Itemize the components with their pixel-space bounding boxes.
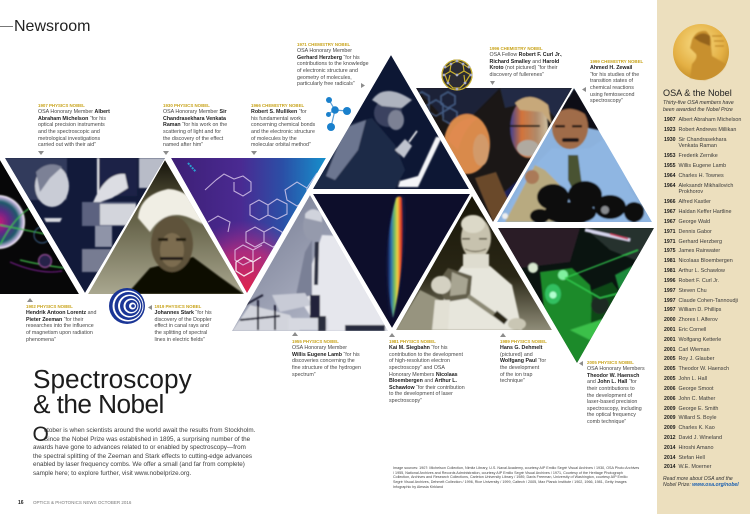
caption: 1999 Zewail: transition states of xyxy=(590,78,633,84)
photo: Herzberg xyxy=(313,55,469,189)
sidebar laureate list: 1981 xyxy=(664,258,676,264)
intro paragraph: awards have gone to advances related to or enabled by spectroscopy—from xyxy=(33,444,246,451)
sidebar laureate list: George Wald xyxy=(678,218,710,224)
sidebar laureate list: 2014 xyxy=(664,454,676,460)
sidebar laureate list: Nicolaas Bloembergen xyxy=(678,258,733,264)
sidebar laureate list: David J. Wineland xyxy=(678,435,722,441)
sidebar laureate list: 2006 xyxy=(664,396,676,402)
caption: 1902 Lorentz and Zeeman: Hendrik Antoon Lorentz and xyxy=(26,310,96,316)
caption: 2005 Haensch and Hall: laser-based precision xyxy=(587,399,637,405)
caption: 1989 Dehmelt and Paul: technique” xyxy=(500,378,525,384)
caption: 1981 Siegbahn, Bloembergen, Schawlow: of high-resolution electron xyxy=(389,358,450,364)
sidebar laureate list: 1966 xyxy=(664,199,676,205)
caption: 2005 Haensch and Hall: the development of xyxy=(587,393,632,399)
sidebar read-more note: Nobel Prize: www.osa.org/nobel xyxy=(663,482,739,488)
sidebar laureate list: Steven Chu xyxy=(678,288,707,294)
caption: 1919 Stark: the splitting of spectral xyxy=(154,330,207,336)
sidebar laureate list: 1997 xyxy=(664,298,676,304)
caption: 1907 Michelson: Abraham Michelson “for his xyxy=(38,116,106,122)
icon: concentric Stark rings xyxy=(109,288,145,324)
sidebar laureate list: Zhores I. Alferov xyxy=(678,317,718,323)
sidebar laureate list: 1964 xyxy=(664,172,676,178)
image credits xyxy=(393,466,640,489)
caption: 1989 Dehmelt and Paul: Wolfgang Paul “for xyxy=(500,358,546,364)
sidebar laureate list: Willard S. Boyle xyxy=(678,415,717,421)
caption: 1989 Dehmelt and Paul: (pictured) and xyxy=(500,352,533,358)
sidebar laureate list: 1971 xyxy=(664,228,676,234)
sidebar laureate list: William D. Phillips xyxy=(678,307,721,313)
main title xyxy=(33,364,192,419)
sidebar laureate list: 2001 xyxy=(664,346,676,352)
caption: 1902 Lorentz and Zeeman: of magnetism upon radiation xyxy=(26,330,93,336)
caption: 1989 Dehmelt and Paul: 1989 PHYSICS NOBEL xyxy=(500,338,547,344)
caption: 1930 Raman: named after him” xyxy=(163,142,203,148)
sidebar laureate list: 1930 xyxy=(664,136,676,142)
sidebar laureate list: Haldan Keffer Hartline xyxy=(678,209,731,215)
caption: 1999 Zewail xyxy=(590,58,644,104)
sidebar laureate list: 1923 xyxy=(664,127,676,133)
caption: 1955 Lamb: Willis Eugene Lamb “for his xyxy=(292,352,360,358)
sidebar laureate list: 1997 xyxy=(664,307,676,313)
caption: 1930 Raman: Chandrasekhara Venkata xyxy=(163,116,226,122)
sidebar laureate list: Aleksandr Mikhailovich xyxy=(678,182,733,188)
sidebar laureate list: Robert F. Curl Jr. xyxy=(678,278,719,284)
sidebar laureate list: Gerhard Herzberg xyxy=(678,238,722,244)
sidebar laureate list: 2001 xyxy=(664,327,676,333)
caption: 1966 Mulliken xyxy=(251,102,315,148)
intro paragraph: Since the Nobel Prize was established in 1895, a surprising number of the xyxy=(44,436,250,443)
caption: 1966 Mulliken: Robert S. Mulliken “for xyxy=(251,109,307,115)
sidebar laureate list: Venkata Raman xyxy=(678,143,717,149)
caption: 1902 Lorentz and Zeeman xyxy=(26,304,96,343)
photo: Dehmelt xyxy=(396,196,552,330)
intro paragraph: enabled by laser frequency combs. We offer a small (and far from complete) xyxy=(33,461,245,468)
sidebar laureate list: 1955 xyxy=(664,163,676,169)
icon: molecule xyxy=(326,97,351,131)
caption: 1996 Curl, Smalley, Kroto: Richard Smalley and Harold xyxy=(490,59,559,65)
sidebar laureate list: Willis Eugene Lamb xyxy=(678,163,726,169)
caption: 1955 Lamb: OSA Honorary Member xyxy=(292,345,347,351)
caption: 1966 Mulliken: and the electronic structure xyxy=(251,129,315,135)
caption: 1907 Michelson: metrological investigations xyxy=(38,136,100,142)
photo: Curl and Smalley xyxy=(415,88,572,222)
sidebar laureate list: Alfred Kastler xyxy=(678,199,711,205)
caption: 2005 Haensch and Hall: and John L. Hall “for xyxy=(587,379,637,385)
caption: 1907 Michelson: and the spectroscopic and xyxy=(38,129,100,135)
caption: 1955 Lamb: spectrum” xyxy=(292,372,316,378)
caption: 1919 Stark xyxy=(154,304,212,343)
sidebar laureate list: 2009 xyxy=(664,425,676,431)
intro paragraph: the spectral splitting of the Zeeman and Stark effects to cutting-edge advances xyxy=(33,453,252,460)
main title: & the Nobel xyxy=(33,389,164,419)
sidebar laureate list: George Smoot xyxy=(678,386,714,392)
caption: 1996 Curl, Smalley, Kroto: Kroto (not pictured) “for their xyxy=(490,65,558,71)
sidebar background xyxy=(657,0,750,514)
icon: Nobel medal xyxy=(673,24,729,80)
caption: 1955 Lamb xyxy=(292,338,361,378)
caption: 1981 Siegbahn, Bloembergen, Schawlow: Kai M. Siegbahn “for his xyxy=(389,345,448,351)
caption: 1907 Michelson: carried out with their aid” xyxy=(38,142,96,148)
caption: 1981 Siegbahn, Bloembergen, Schawlow: Honorary Members Nicolaas xyxy=(389,372,458,378)
sidebar laureate list: 2005 xyxy=(664,376,676,382)
caption: 1989 Dehmelt and Paul: Hans G. Dehmelt xyxy=(500,345,542,351)
sidebar laureate list: John L. Hall xyxy=(678,376,707,382)
intro paragraph xyxy=(32,423,255,477)
sidebar laureate list: Theodor W. Haensch xyxy=(678,366,729,372)
sidebar laureate list: Hiroshi Amano xyxy=(678,444,714,450)
caption: 1981 Siegbahn, Bloembergen, Schawlow: Schawlow “for their contribution xyxy=(389,385,465,391)
intro paragraph: O xyxy=(32,423,49,446)
intro paragraph: sample here; to explore further, visit www.nobelprize.org. xyxy=(33,470,191,477)
sidebar heading: OSA & the Nobel xyxy=(663,88,732,98)
sidebar laureate list: George E. Smith xyxy=(678,406,718,412)
sidebar laureate list: 1907 xyxy=(664,117,676,123)
caption: 1966 Mulliken: 1966 CHEMISTRY NOBEL xyxy=(251,102,304,108)
caption: 1996 Curl, Smalley, Kroto: 1996 CHEMISTRY NOBEL xyxy=(490,46,543,50)
sidebar laureate list: 1981 xyxy=(664,268,676,274)
sidebar laureate list: 2001 xyxy=(664,336,676,342)
caption: 1955 Lamb: discoveries concerning the xyxy=(292,358,355,364)
main title: Spectroscopy xyxy=(33,364,192,394)
sidebar laureate list: W.E. Moerner xyxy=(678,464,711,470)
triangle photo mosaic xyxy=(0,24,729,366)
caption: 1981 Siegbahn, Bloembergen, Schawlow: contribution to the development xyxy=(389,352,463,358)
sidebar laureate list: 2009 xyxy=(664,406,676,412)
caption: 1902 Lorentz and Zeeman: Pieter Zeeman “for their xyxy=(26,317,83,323)
caption: 1981 Siegbahn, Bloembergen, Schawlow: spectroscopy” xyxy=(389,398,422,404)
caption: 1971 Herzberg: particularly free radicals” xyxy=(297,81,355,87)
caption: 2005 Haensch and Hall: comb technique” xyxy=(587,419,626,425)
sidebar laureate list: 1953 xyxy=(664,153,676,159)
photo: molecular structure in purple xyxy=(171,158,326,293)
sidebar laureate list: James Rainwater xyxy=(678,248,720,254)
caption: 1930 Raman: Raman “for his work on the xyxy=(163,122,227,128)
sidebar laureate list: 2014 xyxy=(664,464,676,470)
image credits: Collection, Archives and Research Collections, Carleton University Library / 1989, Davis Freeman, University of Washington, courtesy AIP Emilio xyxy=(393,475,628,479)
caption: 1919 Stark: Johannes Stark “for his xyxy=(154,310,212,316)
photo: Lamb xyxy=(232,195,388,331)
caption: 1981 Siegbahn, Bloembergen, Schawlow: spectroscopy” and OSA xyxy=(389,365,445,371)
caption: 1907 Michelson: 1907 PHYSICS NOBEL xyxy=(38,102,85,108)
caption: 1907 Michelson xyxy=(38,102,110,148)
photo: Raman xyxy=(88,160,244,294)
caption: 1996 Curl, Smalley, Kroto: discovery of fullerenes” xyxy=(490,72,544,78)
caption: 1999 Zewail: chemical reactions xyxy=(590,85,634,91)
sidebar laureate list: Albert Abraham Michelson xyxy=(678,117,741,123)
caption: 1919 Stark: 1919 PHYSICS NOBEL xyxy=(154,304,201,308)
sidebar laureate list: Eric Cornell xyxy=(678,327,706,333)
caption: 1955 Lamb: fine structure of the hydrogen xyxy=(292,365,361,371)
caption: 1971 Herzberg: Gerhard Herzberg “for his xyxy=(297,55,360,61)
caption: 1999 Zewail: Ahmed H. Zewail xyxy=(590,65,632,71)
sidebar laureate list: Prokhorov xyxy=(678,189,703,195)
icon: fullerene ball xyxy=(442,60,472,90)
caption: 1907 Michelson: OSA Honorary Member Albert xyxy=(38,109,110,115)
sidebar laureate list: 1975 xyxy=(664,248,676,254)
sidebar laureate list: 1971 xyxy=(664,238,676,244)
caption: 1989 Dehmelt and Paul: the development xyxy=(500,365,539,371)
sidebar intro xyxy=(663,100,734,113)
caption: 1930 Raman: OSA Honorary Member Sir xyxy=(163,109,227,115)
sidebar laureate list: Wolfgang Ketterle xyxy=(678,336,721,342)
caption: 2005 Haensch and Hall: Theodor W. Haensch xyxy=(587,373,639,379)
sidebar laureate list: 2009 xyxy=(664,415,676,421)
caption: 1981 Siegbahn, Bloembergen, Schawlow: 1981 PHYSICS NOBEL xyxy=(389,338,436,344)
caption: 1919 Stark: effect in canal rays and xyxy=(154,323,209,329)
caption: 1955 Lamb: 1955 PHYSICS NOBEL xyxy=(292,338,339,344)
caption: 1999 Zewail: using femtosecond xyxy=(590,92,634,98)
caption: 1966 Mulliken: his fundamental work xyxy=(251,116,301,122)
caption: 1999 Zewail: 1999 CHEMISTRY NOBEL xyxy=(590,58,643,64)
sidebar laureate list: Frederik Zernike xyxy=(678,153,718,159)
section label: Newsroom: Newsroom xyxy=(14,18,90,35)
caption: 1902 Lorentz and Zeeman: 1902 PHYSICS NOBEL xyxy=(26,304,73,308)
sidebar laureate list: Stefan Hell xyxy=(678,454,705,460)
caption: 2005 Haensch and Hall xyxy=(587,360,645,425)
caption: 1930 Raman xyxy=(163,102,227,148)
sidebar laureate list: Robert Andrews Millikan xyxy=(678,127,736,133)
sidebar laureate list: 1964 xyxy=(664,182,676,188)
sidebar laureate list: 1996 xyxy=(664,278,676,284)
sidebar intro: Thirty-five OSA members have xyxy=(663,100,734,106)
caption: 1971 Herzberg: 1971 CHEMISTRY NOBEL xyxy=(297,42,350,46)
photo: Michelson xyxy=(5,158,165,293)
caption: 1902 Lorentz and Zeeman: phenomena” xyxy=(26,337,56,343)
caption: 1989 Dehmelt and Paul xyxy=(500,338,547,384)
caption: 1907 Michelson: optical precision instruments xyxy=(38,122,105,128)
sidebar laureate list: 1967 xyxy=(664,218,676,224)
page number: 16 xyxy=(18,500,24,506)
sidebar laureate list: Roy J. Glauber xyxy=(678,356,714,362)
sidebar laureate list: 2012 xyxy=(664,435,676,441)
caption: 1996 Curl, Smalley, Kroto: OSA Fellow Robert F. Curl Jr., xyxy=(490,52,563,58)
image credits: Segrè Visual Archives, Dehmelt Collection / 1996, Rice University / 1999, Caltech / 2005, Max Planck Institute / 1902, 1966, 1981, Getty Images xyxy=(393,480,627,484)
caption: 2005 Haensch and Hall: OSA Honorary Members xyxy=(587,366,645,372)
photo: green laser frequency comb lab xyxy=(498,228,654,363)
sidebar read-more note xyxy=(663,476,739,488)
sidebar laureate list: Sir Chandrasekhara xyxy=(678,136,726,142)
sidebar laureate list: 2000 xyxy=(664,317,676,323)
caption: 1902 Lorentz and Zeeman: researches into the influence xyxy=(26,323,94,329)
sidebar laureate list: Claude Cohen-Tannoudji xyxy=(678,298,738,304)
sidebar laureate list: Charles K. Kao xyxy=(678,425,715,431)
sidebar laureate list: John C. Mather xyxy=(678,396,715,402)
intro paragraph: ctober is when scientists around the world await the results from Stockholm. xyxy=(44,427,255,434)
photo: Zewail xyxy=(497,88,652,224)
sidebar laureate list: 1967 xyxy=(664,209,676,215)
caption: 1919 Stark: lines in electric fields” xyxy=(154,337,205,343)
sidebar laureate list: Charles H. Townes xyxy=(678,172,724,178)
caption: 1966 Mulliken: molecular orbital method” xyxy=(251,142,311,148)
photo: rainbow spectrum xyxy=(313,194,470,328)
caption: 1981 Siegbahn, Bloembergen, Schawlow xyxy=(389,338,465,404)
caption: 1999 Zewail: spectroscopy” xyxy=(590,98,623,104)
caption: 1971 Herzberg xyxy=(297,42,369,87)
caption: 1971 Herzberg: OSA Honorary Member xyxy=(297,48,352,54)
caption: 1971 Herzberg: geometry of molecules, xyxy=(297,75,352,81)
sidebar laureate list: 1997 xyxy=(664,288,676,294)
caption: 2005 Haensch and Hall: their contributions to xyxy=(587,386,635,392)
caption: 1996 Curl, Smalley, Kroto xyxy=(490,46,563,78)
caption: 1966 Mulliken: of molecules by the xyxy=(251,136,297,142)
caption: 2005 Haensch and Hall: the optical frequency xyxy=(587,412,636,418)
photo: plasma sphere xyxy=(0,160,79,294)
caption: 1930 Raman: the discovery of the effect xyxy=(163,136,223,142)
sidebar laureate list: 2014 xyxy=(664,444,676,450)
markers: small pointer triangles xyxy=(27,81,586,366)
image credits: Image sources: 1907: Michelson Collection, Nimitz Library, U.S. Naval Academy, courtesy AIP Emilio Segrè Visual Archives / 1930, OSA Photo Archives xyxy=(393,466,639,470)
caption: 1919 Stark: discovery of the Doppler xyxy=(154,317,212,323)
caption: 1930 Raman: 1930 PHYSICS NOBEL xyxy=(163,102,210,108)
sidebar read-more note: Read more about OSA and the xyxy=(663,476,733,482)
sidebar laureate list: 2005 xyxy=(664,356,676,362)
caption: 1989 Dehmelt and Paul: of the ion trap xyxy=(500,372,532,378)
image credits: / 1955, National Archives and Records Administration, courtesy AIP Emilio Segrè Visual Archives / 1971, Courtesy of the Heritage Photograph xyxy=(393,471,623,475)
sidebar laureate list: 2005 xyxy=(664,366,676,372)
sidebar laureate list: Carl Wieman xyxy=(678,346,710,352)
caption: 1966 Mulliken: concerning chemical bonds xyxy=(251,122,315,128)
running footer: OPTICS & PHOTONICS NEWS OCTOBER 2016 xyxy=(33,500,131,505)
sidebar laureate list: Arthur L. Schawlow xyxy=(678,268,725,274)
caption: 1999 Zewail: “for his studies of the xyxy=(590,72,639,78)
caption: 1981 Siegbahn, Bloembergen, Schawlow: Bloembergen and Arthur L. xyxy=(389,378,457,384)
sidebar laureate list: 2006 xyxy=(664,386,676,392)
caption: 1971 Herzberg: of electronic structure and xyxy=(297,68,358,74)
caption: 2005 Haensch and Hall: 2005 PHYSICS NOBEL xyxy=(587,360,634,364)
caption: 1981 Siegbahn, Bloembergen, Schawlow: to the development of laser xyxy=(389,391,453,397)
sidebar laureate list: Dennis Gabor xyxy=(678,228,712,234)
caption: 2005 Haensch and Hall: spectroscopy, including xyxy=(587,406,642,412)
sidebar intro: been awarded the Nobel Prize xyxy=(663,107,733,113)
caption: 1971 Herzberg: contributions to the knowledge xyxy=(297,61,369,67)
caption: 1930 Raman: scattering of light and for xyxy=(163,129,221,135)
image credits: Infographic by Alessia Kirkland xyxy=(393,485,443,489)
